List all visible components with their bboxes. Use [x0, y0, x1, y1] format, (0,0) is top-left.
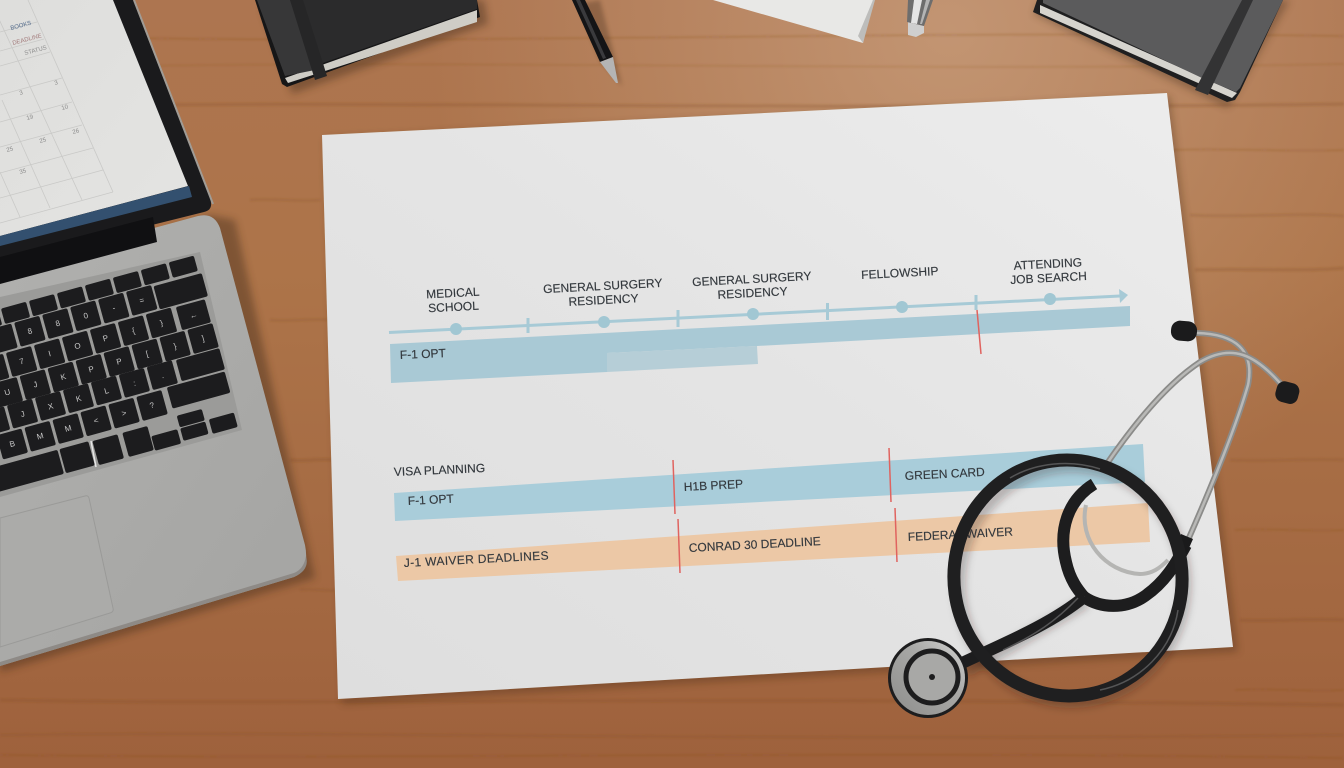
calendar on screen: DEADLINE — [12, 33, 43, 47]
label: general surgery residency 1: GENERAL SURGERY — [543, 276, 663, 296]
key legends: X — [47, 401, 55, 411]
hinge — [0, 217, 157, 284]
notebook top left — [255, 0, 488, 94]
key legends: ] — [201, 334, 205, 343]
label: medical school: MEDICAL — [426, 285, 480, 301]
blue bar label: green card: GREEN CARD — [904, 465, 985, 483]
timeline milestone dots — [450, 293, 1056, 335]
calendar on screen — [0, 0, 113, 223]
key legends: { — [131, 326, 136, 335]
calendar on screen: 35 — [19, 168, 28, 176]
key legends: J — [32, 380, 38, 390]
key legends: 8 — [55, 318, 62, 328]
number row — [0, 271, 208, 363]
key legends: [ — [145, 349, 150, 359]
calendar on screen: 25 — [39, 137, 48, 145]
ear tips — [1170, 320, 1301, 406]
notebook top right — [1033, 0, 1290, 108]
upper letter row — [0, 298, 211, 385]
calendar on screen: 10 — [61, 104, 70, 112]
key legends: 8 — [27, 326, 34, 336]
pen — [572, 0, 622, 86]
key legends: P — [115, 357, 123, 367]
key legends: M — [36, 431, 45, 442]
laptop screen — [0, 0, 188, 236]
calendar on screen: 3 — [54, 80, 59, 87]
key legends: . — [160, 371, 165, 380]
screen blue taskbar — [0, 186, 192, 246]
calendar on screen: 3 — [19, 90, 24, 97]
calendar on screen: BOOKS — [10, 21, 32, 32]
main tube loop — [939, 445, 1197, 711]
chest piece — [888, 638, 968, 718]
bottom letter row — [0, 371, 232, 459]
career timeline — [389, 255, 1130, 383]
calendar on screen: 26 — [72, 128, 81, 136]
space bar row — [0, 425, 154, 509]
key legends: M — [64, 423, 73, 434]
function row — [0, 256, 198, 332]
timeline axis with arrow — [389, 289, 1128, 333]
key legends: } — [173, 341, 178, 351]
blue visa bar — [394, 444, 1145, 521]
blue bar label: h1b prep: H1B PREP — [683, 477, 743, 494]
key legends: K — [75, 394, 83, 404]
key legends: 0 — [83, 311, 90, 321]
key legends: K — [60, 372, 68, 382]
paper shadow — [325, 96, 1238, 704]
visa planning section — [394, 444, 1150, 581]
calendar on screen: STATUS — [24, 45, 48, 57]
paper sheet — [322, 93, 1238, 704]
calendar on screen: 19 — [26, 114, 35, 122]
paper face — [322, 93, 1233, 699]
key legends: : — [132, 379, 137, 388]
red marker — [977, 310, 981, 354]
key legends: B — [8, 439, 16, 449]
label: fellowship: FELLOWSHIP — [861, 264, 939, 282]
label: medical school: SCHOOL — [428, 299, 480, 315]
key legends: J — [20, 409, 26, 419]
white note pad — [713, 0, 875, 43]
key legends: P — [87, 364, 95, 374]
connector — [1175, 534, 1193, 557]
label: general surgery residency 1: RESIDENCY — [568, 291, 639, 309]
trackpad — [0, 496, 113, 647]
orange bar label: conrad 30 deadline: CONRAD 30 DEADLINE — [688, 534, 821, 555]
key legends: 7 — [18, 356, 26, 366]
silver binaural tubes — [1106, 333, 1280, 540]
y-shaped tubing — [960, 484, 1186, 664]
laptop — [0, 0, 315, 672]
key legends: < — [93, 416, 100, 426]
keyboard keys — [0, 255, 244, 510]
key legends: - — [111, 303, 117, 313]
lighter overlap bar — [607, 346, 758, 372]
key legends: ← — [189, 310, 199, 321]
arrow keys — [148, 401, 238, 451]
key legends: ? — [149, 400, 156, 410]
label: attending job search: JOB SEARCH — [1010, 269, 1087, 287]
laptop shadow — [0, 215, 315, 672]
screen bezel — [0, 0, 211, 263]
label: attending job search: ATTENDING — [1013, 255, 1082, 273]
label: general surgery residency 2: GENERAL SURGERY — [692, 269, 812, 289]
key legends — [0, 283, 219, 449]
stethoscope shadow — [959, 466, 1185, 702]
key legends: L — [103, 386, 110, 396]
key legends: I — [47, 349, 52, 358]
orange bar label: j-1 waiver deadlines: J-1 WAIVER DEADLINES — [403, 548, 549, 570]
keyboard well — [0, 252, 242, 497]
stethoscope — [888, 320, 1301, 718]
home row — [0, 323, 219, 408]
tube highlights — [1003, 463, 1178, 690]
orange waiver bar — [396, 503, 1150, 581]
silver pen — [907, 0, 933, 37]
label: general surgery residency 2: RESIDENCY — [717, 284, 788, 302]
key legends: > — [121, 408, 128, 418]
laptop base — [0, 215, 306, 666]
bar label: f-1 opt: F-1 OPT — [400, 346, 447, 362]
key legends: = — [138, 295, 146, 305]
key legends: O — [73, 341, 82, 351]
red deadline markers — [673, 448, 897, 573]
lower letter row — [0, 347, 225, 436]
translucent silver crescent — [1085, 505, 1168, 574]
key legends: } — [159, 318, 164, 328]
blue bar label: f-1 opt: F-1 OPT — [407, 492, 455, 508]
calendar on screen: 25 — [6, 146, 15, 154]
key legends: P — [102, 333, 109, 343]
f-1 opt bar — [390, 306, 1130, 383]
key legends: U — [3, 387, 12, 398]
heading: visa planning: VISA PLANNING — [394, 461, 485, 479]
orange bar label: federal waiver: FEDERAL WAIVER — [907, 524, 1013, 544]
